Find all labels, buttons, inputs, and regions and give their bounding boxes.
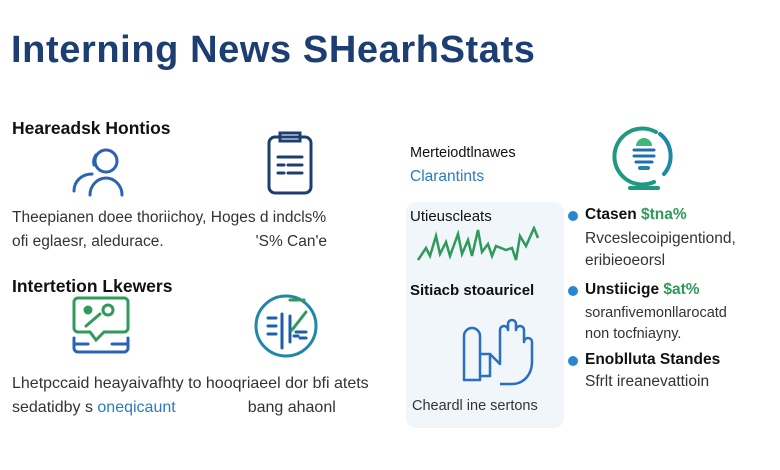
bullet 3: Sfrlt ireanevattioin <box>585 373 709 390</box>
bullet 2: non tocfniayny. <box>585 326 681 342</box>
bullet 1 <box>568 206 736 269</box>
text block: section 2 <box>12 375 369 416</box>
bullet 3: Enoblluta Standes <box>585 351 720 368</box>
text block: section 1 <box>12 209 327 250</box>
text block: section 1: Theepianen doee thoriichoy, Hoges d indcls% <box>12 209 326 226</box>
text block: section 2: sedatidby s oneqicaunt bang ahaonl <box>12 399 336 416</box>
icon: person <box>72 148 124 196</box>
bullet 1: eribieoeorsl <box>585 252 665 269</box>
bullet list <box>568 206 736 390</box>
icon: hand <box>462 318 534 386</box>
icon: chat tools <box>72 296 130 354</box>
bullet 1: Ctasen $tna% <box>585 206 687 223</box>
text block: section 2: Lhetpccaid heayaivafhty to hooqriaeel dor bfi atets <box>12 375 369 392</box>
heading: left section 2: Intertetion Lkewers <box>12 276 172 296</box>
heading: right top: Clarantints <box>410 168 484 185</box>
caption: Cheardl ine sertons <box>412 398 538 414</box>
panel: stats card <box>406 202 564 428</box>
title: Interning News SHearhStats <box>11 29 536 71</box>
icon: lightbulb cycle <box>612 126 673 190</box>
heading: chart: Utieuscleats <box>410 208 492 225</box>
heading: right top <box>410 145 516 185</box>
heading: hand: Sitiacb stoauricel <box>410 282 534 299</box>
chart: line <box>417 226 540 261</box>
bullet 3 <box>568 351 720 390</box>
icon: circle lines <box>254 294 318 358</box>
bullet 2: Unstiicige $at% <box>585 281 700 298</box>
bullet 2 <box>568 281 727 342</box>
bullet 2: soranfivemonllarocatd <box>585 305 727 321</box>
heading: right top: Merteiodtlnawes <box>410 145 516 161</box>
heading: left section 1: Heareadsk Hontios <box>12 118 171 138</box>
text block: section 1: ofi eglaesr, aledurace. 'S% Can'e <box>12 233 327 250</box>
bullet 1: Rvceslecoipigentiond, <box>585 230 736 247</box>
icon: clipboard <box>268 132 312 194</box>
